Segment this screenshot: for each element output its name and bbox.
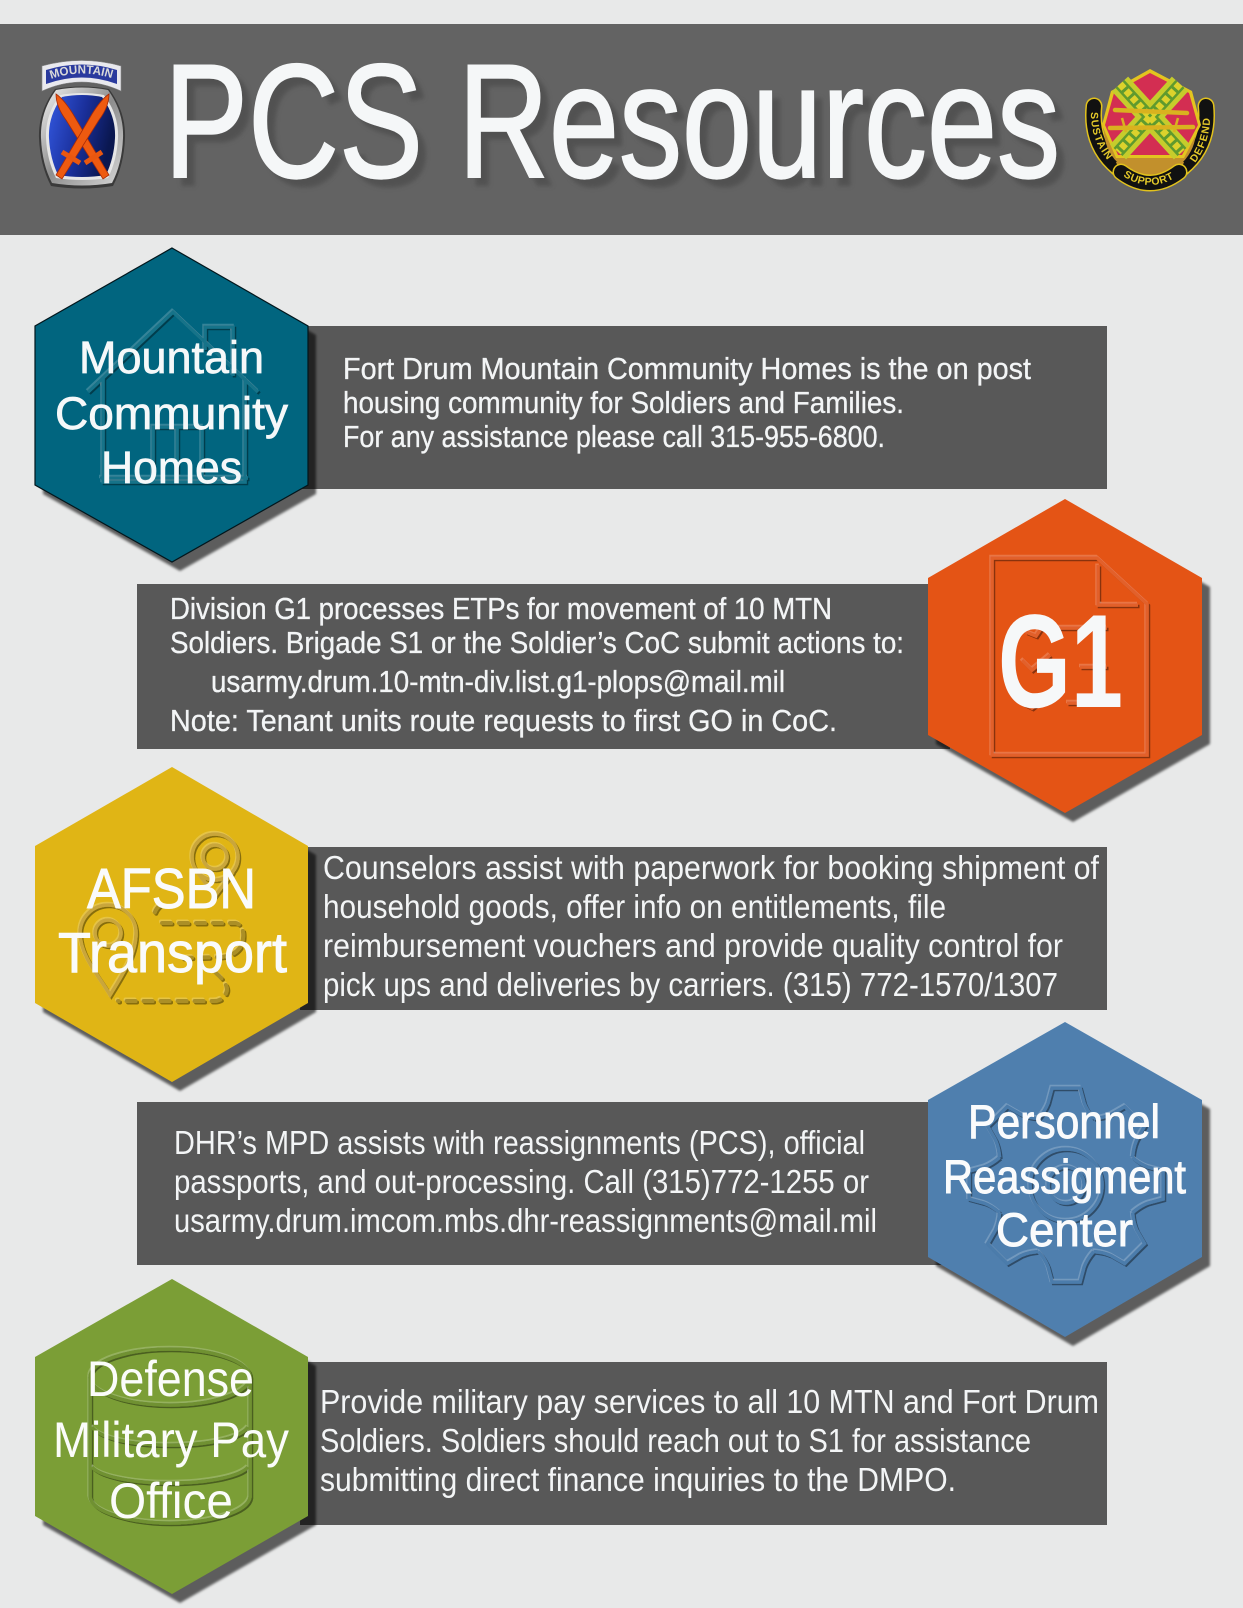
- hexagon label: [58, 857, 287, 985]
- description bar: [300, 326, 1107, 489]
- description text: Provide military pay services to all 10 MTN and Fort Drum: [320, 1384, 1099, 1421]
- description text: Soldiers. Soldiers should reach out to S1 for assistance: [320, 1423, 1031, 1460]
- icon: Installation Management Command crest: [1085, 69, 1215, 192]
- description text: household goods, offer info on entitlements, file: [323, 889, 946, 926]
- description text: pick ups and deliveries by carriers. (315) 772-1570/1307: [323, 967, 1058, 1004]
- description text: reimbursement vouchers and provide quality control for: [323, 928, 1063, 965]
- description text: passports, and out-processing. Call (315)772-1255 or: [174, 1164, 869, 1201]
- description text: [323, 850, 1100, 1004]
- icon: database stack: [90, 1349, 250, 1523]
- panel: Personnel Reassigment Center: [137, 1022, 1210, 1346]
- description text: [343, 352, 1031, 454]
- hexagon shadow: [936, 508, 1210, 822]
- green hexagon: [35, 1279, 308, 1594]
- teal hexagon: [35, 248, 308, 562]
- description text: [174, 1125, 877, 1240]
- hexagon label: Transport: [58, 921, 287, 985]
- hexagon label: AFSBN: [87, 857, 256, 921]
- icon: Installation Management Command crest: SUSTAIN: [1090, 112, 1113, 160]
- icon: document checklist: [992, 558, 1147, 755]
- description text: submitting direct finance inquiries to the DMPO.: [320, 1462, 956, 1499]
- hexagon label: Military Pay: [53, 1412, 289, 1468]
- description text: Counselors assist with paperwork for booking shipment of: [323, 850, 1100, 887]
- hexagon shadow: [43, 776, 316, 1091]
- hexagon shadow: [43, 1288, 316, 1603]
- description text: [320, 1384, 1099, 1499]
- description bar: [137, 1102, 950, 1265]
- description text: Soldiers. Brigade S1 or the Soldier’s CoC submit actions to:: [170, 626, 904, 660]
- description text: [170, 592, 904, 738]
- description text: Division G1 processes ETPs for movement of 10 MTN: [170, 592, 832, 626]
- description text: Fort Drum Mountain Community Homes is the on post: [343, 352, 1031, 386]
- description text: housing community for Soldiers and Families.: [343, 386, 904, 420]
- description bar: [137, 584, 950, 749]
- hexagon label: Homes: [101, 442, 242, 493]
- icon: 10th Mountain Division insignia: [39, 60, 125, 188]
- description bar: [300, 847, 1107, 1010]
- blue hexagon: [928, 1022, 1202, 1337]
- hexagon label: Office: [109, 1473, 233, 1529]
- icon: house: [88, 312, 258, 482]
- hexagon label: Reassigment: [943, 1150, 1186, 1203]
- description text: For any assistance please call 315-955-6800.: [343, 420, 885, 454]
- panel: AFSBN Transport: [35, 767, 1107, 1091]
- hexagon label: [53, 1351, 289, 1529]
- hexagon label: Personnel: [968, 1095, 1160, 1148]
- hexagon label: [943, 1095, 1186, 1256]
- hexagon shadow: [43, 257, 316, 571]
- hexagon shadow: [936, 1031, 1210, 1346]
- panel: G1: [137, 499, 1210, 822]
- hexagon label: [55, 332, 288, 493]
- hexagon label: G1: [998, 588, 1123, 736]
- description text: usarmy.drum.10-mtn-div.list.g1-plops@mail.mil: [211, 665, 785, 699]
- header banner: [0, 24, 1243, 235]
- description text: DHR’s MPD assists with reassignments (PCS), official: [174, 1125, 865, 1162]
- hexagon label: Mountain: [79, 332, 264, 383]
- description text: Note: Tenant units route requests to first GO in CoC.: [170, 704, 837, 738]
- hexagon label: Community: [55, 388, 288, 439]
- description bar: [300, 1362, 1107, 1525]
- icon: gear: [969, 1088, 1163, 1282]
- icon: Installation Management Command crest: SUPPORT: [1124, 171, 1172, 185]
- description text: usarmy.drum.imcom.mbs.dhr-reassignments@mail.mil: [174, 1203, 877, 1240]
- yellow hexagon: [35, 767, 308, 1082]
- orange hexagon: [928, 499, 1202, 813]
- panel: Defense Military Pay Office: [35, 1279, 1107, 1603]
- panel: Mountain Community Homes: [35, 248, 1107, 571]
- icon: 10th Mountain Division insignia: MOUNTAIN: [49, 65, 114, 79]
- icon: map pins and route: [80, 834, 243, 1001]
- hexagon label: Center: [996, 1203, 1133, 1256]
- hexagon label: Defense: [87, 1351, 254, 1407]
- icon: Installation Management Command crest: DEFEND: [1190, 118, 1210, 162]
